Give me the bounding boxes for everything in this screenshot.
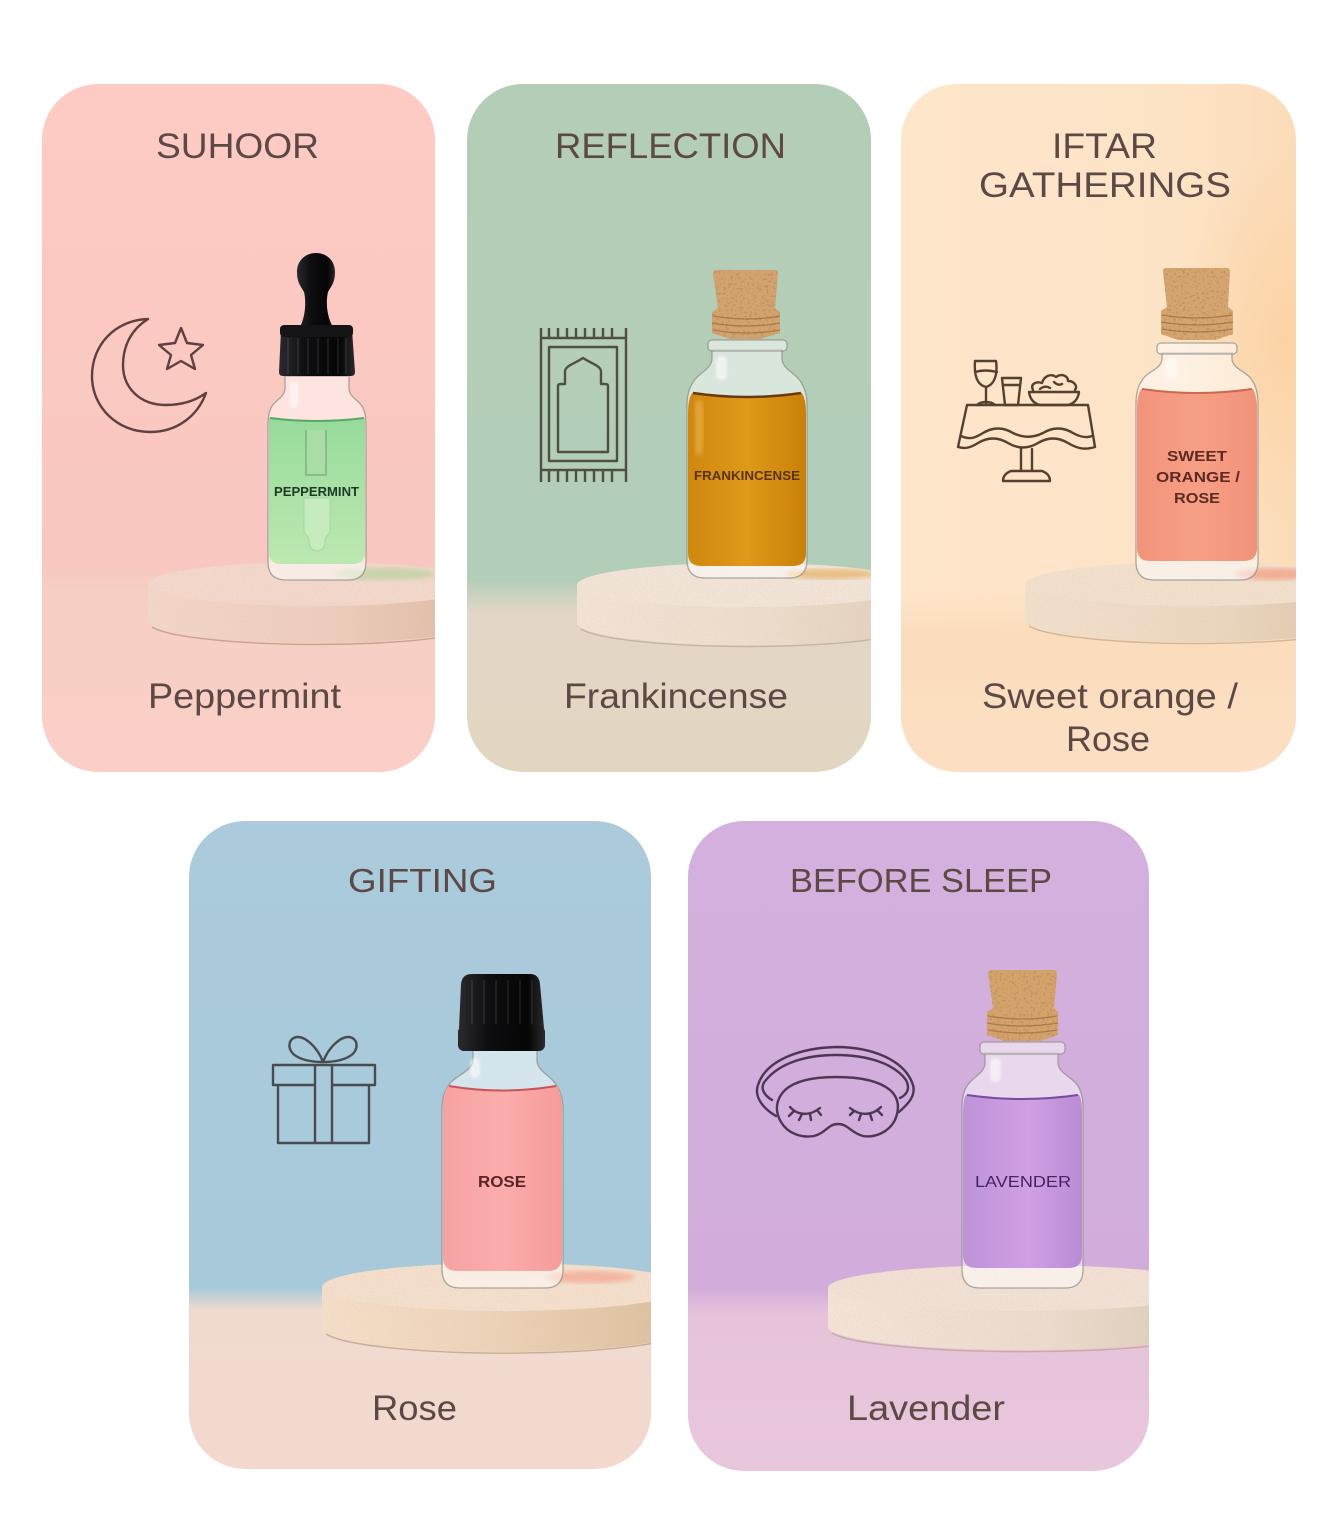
pedestal [1025, 562, 1296, 644]
pedestal [577, 564, 871, 648]
pedestal [828, 1266, 1149, 1352]
heading: GATHERINGS [979, 166, 1231, 205]
icon: iftar table [958, 361, 1095, 481]
heading: SUHOOR [156, 127, 319, 166]
panel: Before sleep [688, 821, 1149, 1471]
icon: crescent and star [92, 319, 206, 432]
bottle label: FRANKINCENSE [694, 468, 800, 483]
heading: BEFORE SLEEP [790, 862, 1052, 899]
dropper bottle [268, 253, 366, 580]
panel: Gifting [189, 821, 688, 1469]
oil name: Peppermint [148, 677, 341, 716]
icon: sleep mask [757, 1047, 914, 1136]
oil name: Rose [372, 1389, 457, 1428]
panel: Iftar gatherings [901, 84, 1338, 772]
oil name: Lavender [847, 1389, 1005, 1428]
panel: Suhoor [42, 84, 435, 772]
oil name: Sweet orange / [982, 677, 1238, 716]
oil name: Frankincense [564, 677, 788, 716]
heading: IFTAR [1052, 127, 1157, 166]
bottle label: ROSE [1174, 490, 1220, 507]
cork bottle [1136, 268, 1258, 580]
pedestal [322, 1264, 651, 1354]
cork bottle [687, 270, 807, 578]
icon: prayer rug [541, 328, 626, 482]
heading [979, 127, 1231, 205]
capped bottle [442, 974, 563, 1288]
bottle label [1156, 448, 1241, 507]
panel: Reflection [467, 84, 871, 772]
bottle label: ROSE [478, 1174, 526, 1191]
heading: REFLECTION [555, 127, 786, 166]
cork bottle [962, 970, 1083, 1288]
bottle label: PEPPERMINT [274, 484, 359, 499]
heading: GIFTING [348, 862, 497, 899]
bottle label: ORANGE / [1156, 469, 1241, 486]
oil name [982, 677, 1238, 759]
bottle label: LAVENDER [975, 1174, 1071, 1191]
bottle label: SWEET [1167, 448, 1227, 465]
oil name: Rose [1066, 720, 1150, 759]
icon: gift box [273, 1037, 375, 1143]
pedestal [148, 563, 435, 646]
